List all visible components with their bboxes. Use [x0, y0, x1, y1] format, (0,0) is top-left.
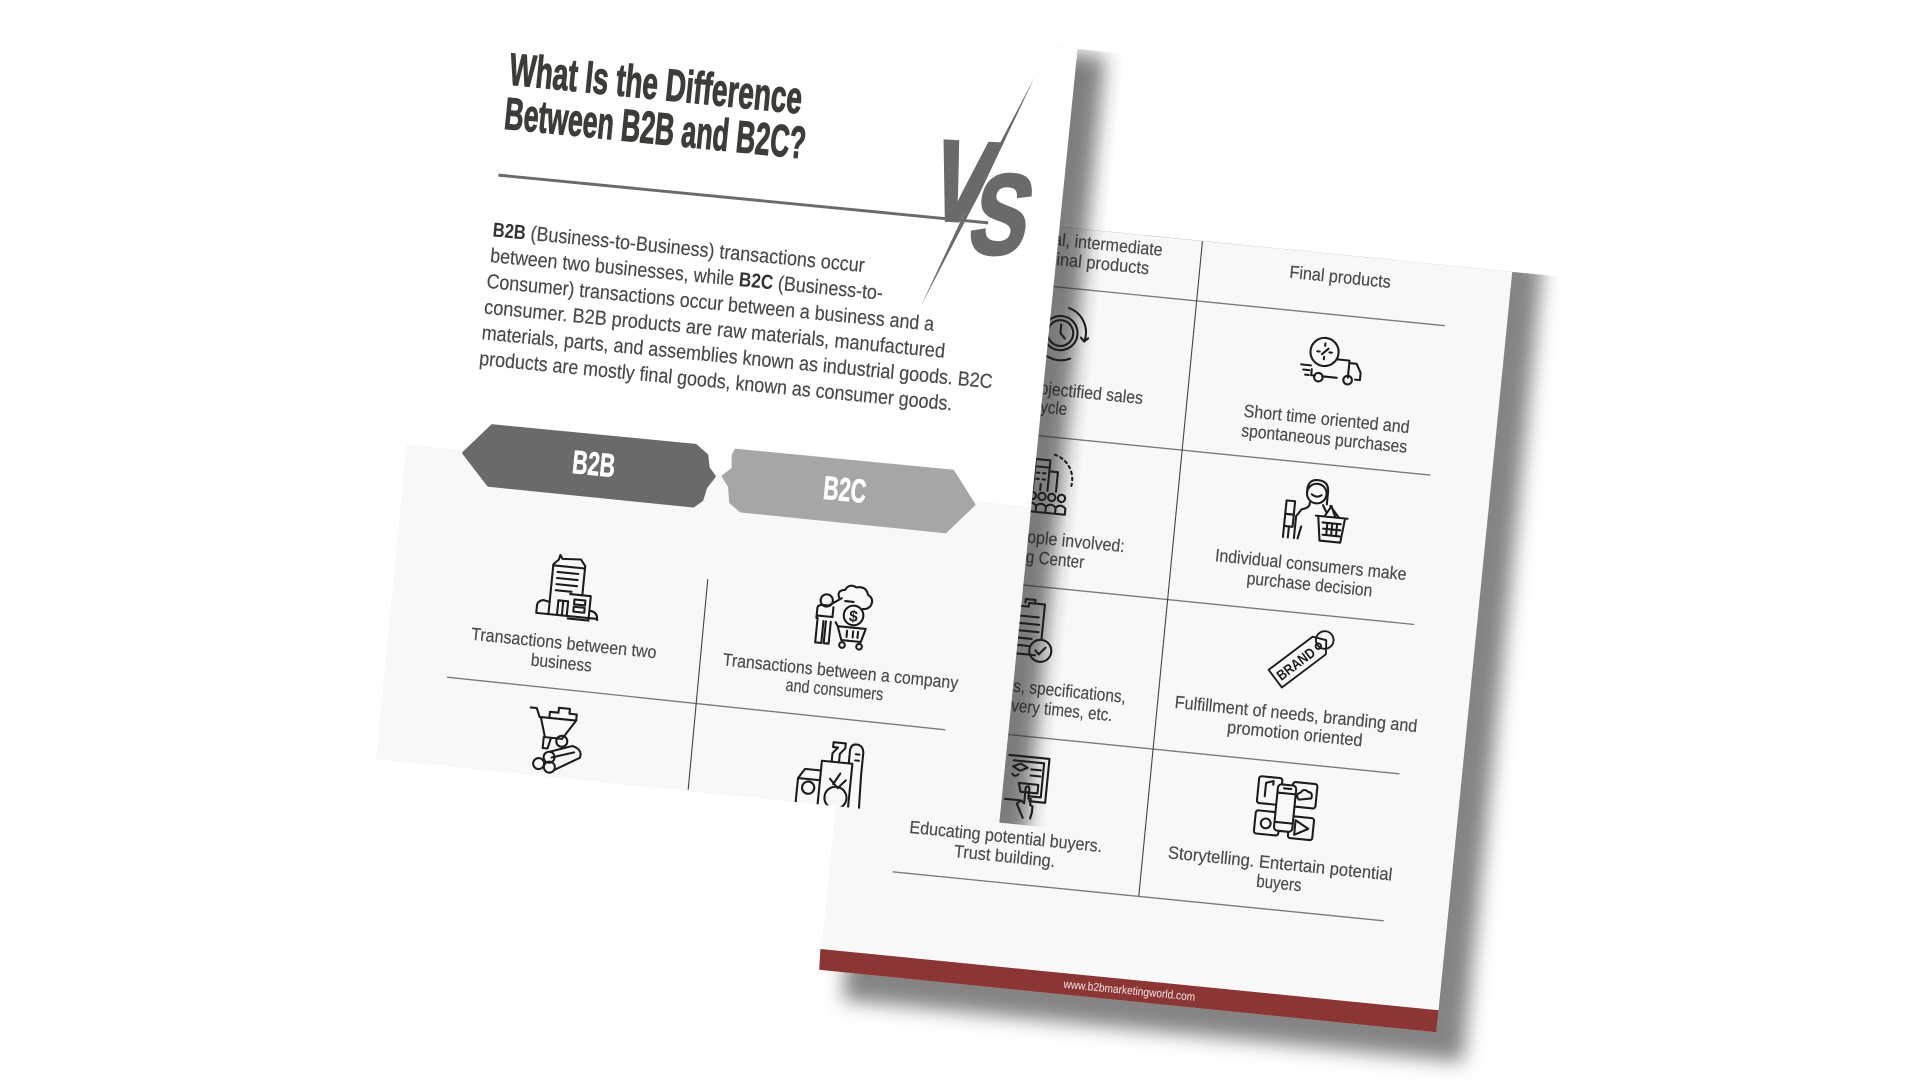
text: fulfillment: promotion oriented	[1226, 717, 1363, 750]
left page drop shadow	[999, 46, 1118, 826]
intro paragraph: products are mostly final goods, known as consumer goods.	[478, 348, 953, 415]
grid lines	[447, 579, 945, 790]
VS mark: S	[959, 149, 1046, 280]
text: sales cycle: cycle	[1032, 396, 1068, 419]
intro paragraph: Consumer) transactions occur between a business and a	[486, 271, 936, 336]
text: specifications: delivery times, etc.	[987, 693, 1113, 725]
badge: B2B: B2B	[571, 444, 617, 485]
text: transactions between company and consumers: Transactions between a company	[722, 649, 959, 693]
text: storytelling: buyers	[1255, 871, 1303, 895]
right column text: final products: Final products	[1289, 262, 1392, 292]
badge: B2B	[464, 426, 714, 506]
intro paragraph: between two businesses, while	[489, 245, 735, 290]
icon: woman with basket	[1283, 477, 1351, 543]
slash	[921, 77, 1035, 306]
red footer band	[819, 949, 1439, 1032]
text: individual consumers	[1214, 545, 1408, 600]
divider line	[498, 175, 988, 223]
icon: consumer with cart: $	[848, 608, 859, 626]
text: sales cycle: Long, objectified sales	[986, 373, 1144, 408]
text: transactions between two business: Transactions between two	[470, 624, 658, 662]
intro paragraph: B2C	[738, 269, 775, 294]
icon: brand tag: BRAND	[1274, 645, 1319, 684]
icon: clock cycle	[1041, 306, 1091, 363]
icon: building and people	[1026, 452, 1075, 515]
icon: groceries	[795, 739, 865, 811]
text: short time oriented: spontaneous purchases	[1240, 420, 1408, 457]
text: people involved: Buying Center	[987, 543, 1085, 572]
badge: B2C: B2C	[822, 470, 868, 511]
text: short time oriented: Short time oriented and	[1243, 401, 1411, 437]
panel: left page (front sheet)	[446, 46, 1078, 823]
panel: right page (back sheet)	[819, 198, 1543, 1062]
text: specifications	[954, 670, 1127, 725]
icon: brand tag	[1269, 627, 1339, 687]
title	[502, 44, 808, 169]
VS mark: V	[917, 116, 1009, 246]
text: educating buyers: Educating potential buyers.	[909, 817, 1103, 856]
intro paragraph: (Business-to-	[777, 273, 884, 305]
left column text: products	[972, 221, 1164, 278]
icon: wheelbarrow and logs	[524, 705, 585, 776]
text: specifications: Contracts, specifications,	[954, 670, 1127, 707]
intro paragraph: materials, parts, and assemblies known as industrial goods. B2C	[481, 322, 994, 393]
intro paragraph: B2B	[492, 219, 527, 244]
text: transactions between company and consumers: and consumers	[785, 675, 884, 704]
intro paragraph	[478, 219, 994, 415]
intro paragraph: (Business-to-Business) transactions occur	[530, 223, 866, 277]
right page sheet	[819, 211, 1512, 1032]
left column text: products: and final products	[1019, 245, 1150, 278]
left column text: products: Raw material, intermediate	[972, 221, 1164, 260]
right page drop shadow	[843, 198, 1543, 1062]
text: individual consumers: purchase decision	[1246, 568, 1373, 600]
text: short time oriented	[1240, 401, 1411, 457]
title: Between B2B and B2C?	[502, 88, 808, 169]
left page grey lower area	[376, 444, 1031, 823]
text: individual consumers: Individual consumers make	[1214, 545, 1408, 584]
text: transactions between two business: business	[530, 650, 593, 676]
text: storytelling: Storytelling. Entertain potential	[1167, 842, 1393, 885]
text: fulfillment: Fulfillment of needs, branding and	[1174, 692, 1418, 736]
text: people involved: Many people involved:	[965, 521, 1126, 556]
grid lines	[893, 241, 1445, 921]
icon: clipboard check	[1010, 598, 1056, 663]
badge: B2C	[724, 451, 973, 531]
footer url: www.b2bmarketingworld.com	[1062, 978, 1196, 1004]
left page white sheet	[376, 0, 1078, 823]
icon: media phone	[1254, 776, 1318, 840]
intro paragraph: consumer. B2B products are raw materials, manufactured	[483, 297, 946, 363]
VS mark	[917, 116, 1046, 280]
title: What Is the Difference	[507, 44, 805, 124]
icon: tablet with hand	[1003, 755, 1050, 820]
icon: truck and clock	[1300, 336, 1364, 386]
icon: consumer with cart	[814, 583, 874, 650]
text: people involved	[965, 521, 1126, 572]
text: educating buyers: Trust building.	[953, 841, 1056, 871]
icon: office building	[536, 553, 603, 621]
